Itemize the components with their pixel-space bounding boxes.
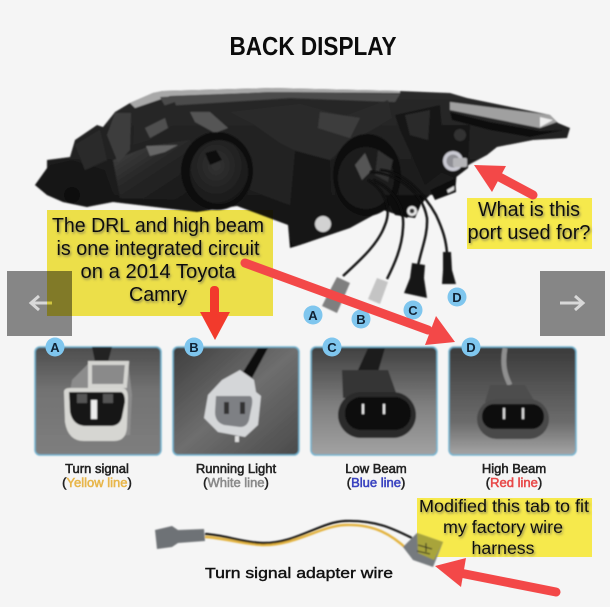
callout: DRL and high beam: Camry [129,283,188,306]
port [435,125,470,178]
label: low beam: (Blue line) [347,475,405,490]
label circles on headlight: B [356,312,366,327]
arrow: down to B [200,286,230,340]
callout: modified tab: Modified this tab to fit [419,496,589,516]
card A: turn signal [35,347,161,455]
headlight photo [35,88,570,248]
label: high beam: High Beam [482,461,546,476]
adapter wire label: Turn signal adapter wire [205,565,393,582]
connector D [442,252,456,284]
card badges: C [327,340,337,355]
callout: port question [467,198,592,249]
card badges: D [466,340,476,355]
callout: modified tab: my factory wire [443,517,563,537]
card C: low beam [311,347,437,455]
callout: DRL and high beam: on a 2014 Toyota [80,260,236,283]
low-beam drum shading [113,140,205,200]
label: running light [196,461,276,490]
card badges: B [189,340,199,355]
arrow: to port [474,165,533,195]
label: turn signal [62,461,132,490]
callout: modified tab: harness [472,538,535,558]
title: BACK DISPLAY [230,31,396,61]
adapter wire [155,521,443,567]
card badges: A [50,340,60,355]
connector A [322,277,350,313]
card badges [46,338,480,356]
label: turn signal: (Yellow line) [62,475,132,490]
label: turn signal: Turn signal [65,461,129,476]
left nav button [7,271,72,336]
connector B [368,278,388,304]
arrow: to modified tab [435,558,556,592]
arrow: long arrow to D [245,263,455,345]
label: running light: (White line) [203,475,269,490]
low beam dust cap [181,132,253,210]
mounting bolt [315,216,331,232]
top clear lens edge [130,88,400,108]
wires and connectors [322,170,456,313]
left socket cluster [35,160,115,207]
label: high beam: (Red line) [486,475,542,490]
label circles on headlight: C [408,303,418,318]
callout: port question: What is this [478,199,580,221]
label: running light: Running Light [196,461,276,476]
label: high beam [482,461,546,490]
centre housing facets [230,100,392,160]
card D: high beam [449,347,576,455]
high beam dust cap [333,134,401,216]
right nav button [540,271,605,336]
upper mount tabs [107,113,131,163]
right clear lens [450,102,557,128]
callout: DRL and high beam: The DRL and high beam [52,214,264,237]
callout: port question: port used for? [468,222,590,244]
label circles on headlight: D [452,290,462,305]
card B: running light [173,347,299,455]
label circles on headlight [304,288,466,328]
callout: DRL and high beam: is one integrated circuit [56,237,260,260]
callout: DRL and high beam [47,210,273,316]
callout: modified tab [417,496,592,558]
mounting tab with hole [385,195,425,218]
label: low beam [345,461,407,490]
label circles on headlight: A [308,308,318,323]
label: low beam: Low Beam [345,461,407,476]
connector C [404,263,427,298]
